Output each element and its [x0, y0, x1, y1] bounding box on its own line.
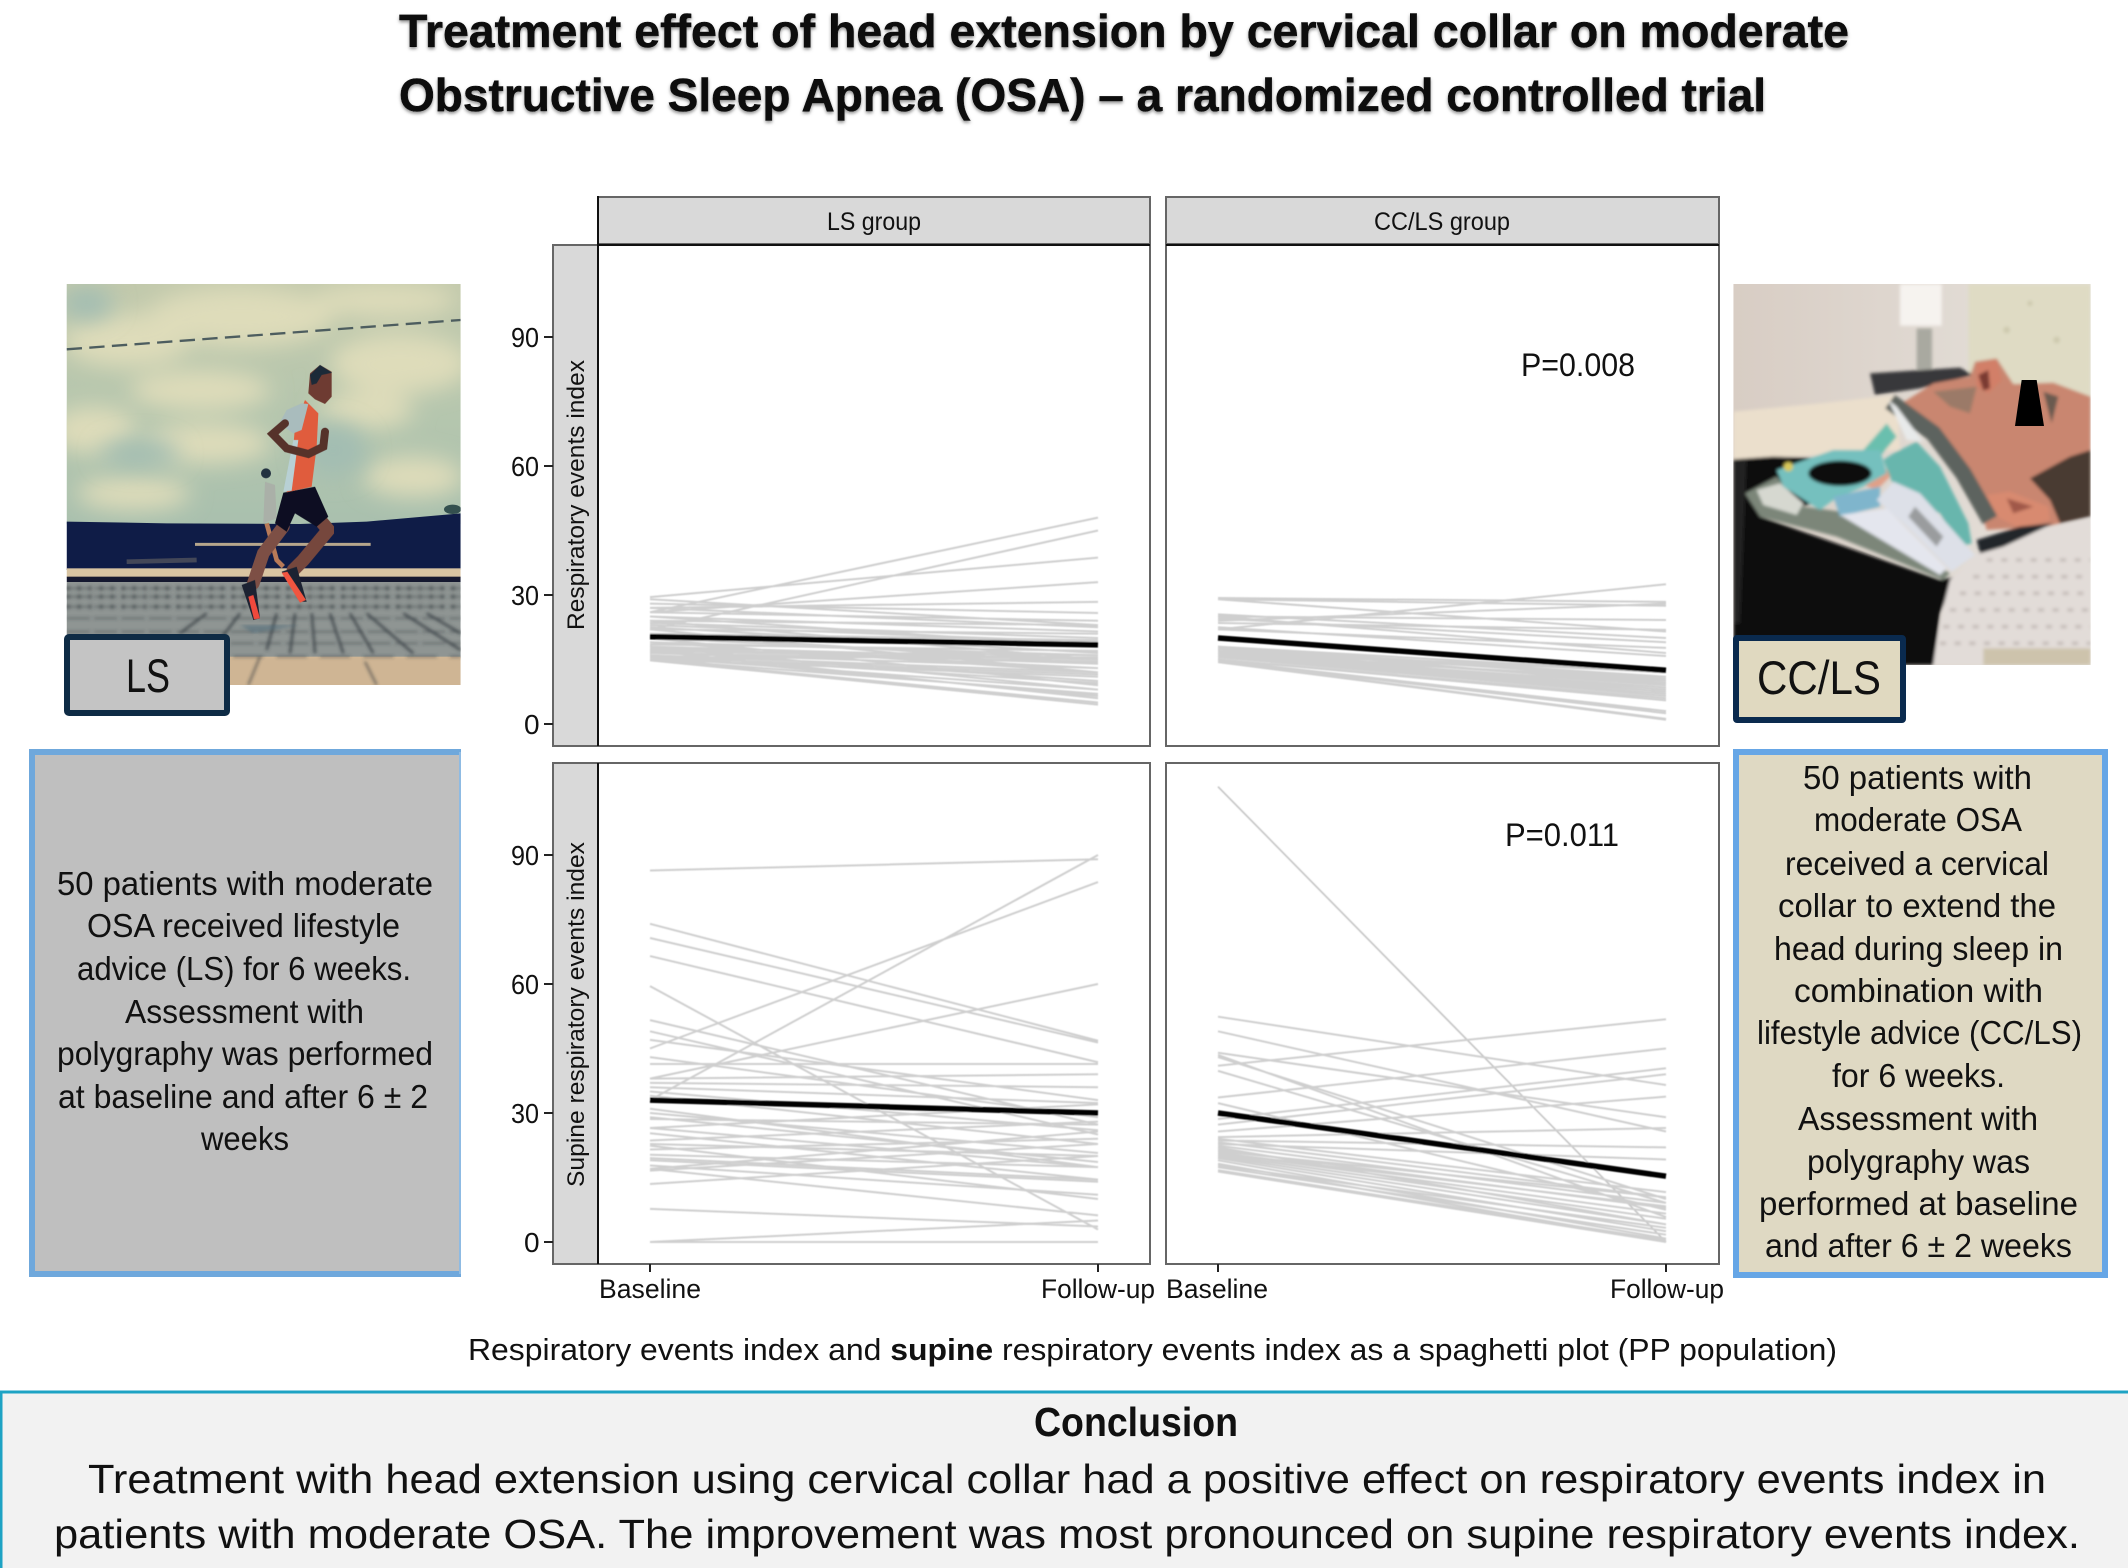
- y axis labels: 60: [511, 969, 539, 1000]
- panel: CC/LS description: 50 patients with: [1803, 759, 2032, 796]
- x axis labels: Follow-up: [1610, 1274, 1724, 1304]
- panel: CC/LS description: for 6 weeks.: [1832, 1057, 2005, 1094]
- y axis labels: 30: [511, 1098, 539, 1129]
- panel: LS description: Assessment with: [125, 993, 364, 1030]
- panel: conclusion: Treatment with head extension using cervical collar had a positive effect on respiratory events index in: [88, 1456, 2046, 1502]
- y axis labels: 30: [511, 580, 539, 611]
- panel: CC/LS description: performed at baseline: [1759, 1185, 2078, 1222]
- photo: patient wearing cervical collar (CC/LS group): [1733, 284, 2091, 665]
- panel: CC/LS description: received a cervical: [1785, 845, 2049, 882]
- shorts: [275, 487, 328, 532]
- label: CC/LS: CC/LS: [1757, 651, 1881, 704]
- title: Obstructive Sleep Apnea (OSA) – a randomized controlled trial: [399, 69, 1766, 121]
- x axis labels: Baseline: [1166, 1274, 1268, 1304]
- hair: [2030, 450, 2091, 523]
- facet heading: CC/LS group: CC/LS group: [1374, 208, 1510, 236]
- panel: CC/LS description: and after 6 ± 2 weeks: [1765, 1227, 2072, 1264]
- panel: LS description: 50 patients with moderate: [57, 865, 433, 902]
- face: [1902, 358, 2091, 530]
- shoes: [242, 580, 260, 620]
- ear: [1987, 492, 2050, 528]
- panel: CC/LS description: collar to extend the: [1778, 887, 2056, 924]
- legs: [253, 527, 283, 583]
- title: [399, 5, 1849, 121]
- panel: conclusion: Conclusion: [1034, 1399, 1238, 1445]
- panel: CC/LS description: combination with: [1794, 972, 2043, 1009]
- title: Treatment effect of head extension by cervical collar on moderate: [399, 5, 1849, 57]
- panel: LS description: [29, 750, 461, 1277]
- pillow: [1933, 518, 2091, 665]
- spaghetti plot: CC/LS group, respiratory events index: [1218, 584, 1666, 720]
- x axis labels: Baseline: [599, 1274, 701, 1304]
- panel: LS description: at baseline and after 6 ± 2: [58, 1078, 428, 1115]
- x axis labels: Follow-up: [1041, 1274, 1155, 1304]
- teal ring: [1777, 450, 1887, 510]
- chart caption: Respiratory events index and supine respiratory events index as a spaghetti plot (PP population): [468, 1332, 1837, 1367]
- p-value: supine respiratory events index: P=0.011: [1505, 817, 1619, 853]
- spaghetti plot: LS group, respiratory events index: [650, 518, 1098, 705]
- label: LS: LS: [126, 649, 170, 702]
- teal front: [1883, 442, 1972, 547]
- y axis labels: 0: [524, 709, 540, 740]
- panel: CC/LS description: [1736, 752, 2105, 1275]
- label: CC/LS: [1736, 638, 1903, 720]
- spaghetti plot: CC/LS group, supine respiratory events index: [1218, 787, 1666, 1242]
- label: LS: [67, 637, 227, 713]
- chart frame: facet strips, panels and axes: [544, 196, 1719, 1272]
- background figure: [261, 468, 271, 478]
- torso: [287, 400, 318, 492]
- panel: LS description: weeks: [200, 1120, 289, 1157]
- head: [308, 365, 332, 404]
- panel: CC/LS description: head during sleep in: [1774, 930, 2063, 967]
- row label: respiratory events index: Respiratory events index: [563, 360, 590, 630]
- panel: CC/LS description: Assessment with: [1798, 1100, 2038, 1137]
- y axis labels: 90: [511, 840, 539, 871]
- panel: CC/LS description: moderate OSA: [1814, 801, 2022, 838]
- collar chin strap: [1890, 402, 1990, 520]
- panel: LS description: polygraphy was performed: [57, 1035, 433, 1072]
- photo: runner (LS group): [50, 283, 470, 685]
- neck: [1865, 469, 1891, 490]
- x axis labels: [599, 1274, 1724, 1304]
- panel: CC/LS description: polygraphy was: [1807, 1143, 2030, 1180]
- panel: CC/LS description: lifestyle advice (CC/LS): [1757, 1014, 2082, 1051]
- black eye bar: [2015, 380, 2044, 426]
- panel: LS description: advice (LS) for 6 weeks.: [77, 950, 411, 987]
- grey pad: [1745, 477, 1950, 580]
- y axis labels: [511, 322, 540, 1258]
- panel: LS description: OSA received lifestyle: [87, 907, 400, 944]
- panel: conclusion: [1, 1392, 2128, 1568]
- panel: conclusion: patients with moderate OSA. The improvement was most pronounced on supine respiratory events index.: [54, 1511, 2080, 1557]
- y axis labels: 60: [511, 451, 539, 482]
- y axis labels: 90: [511, 322, 539, 353]
- y axis labels: 0: [524, 1227, 540, 1258]
- arm: [273, 423, 325, 454]
- spaghetti plot: LS group, supine respiratory events index: [650, 855, 1098, 1242]
- facet heading: LS group: LS group: [827, 208, 921, 236]
- p-value: respiratory events index: P=0.008: [1521, 347, 1635, 383]
- white plate: [1877, 482, 1975, 572]
- row label: supine respiratory events index: Supine respiratory events index: [563, 842, 590, 1187]
